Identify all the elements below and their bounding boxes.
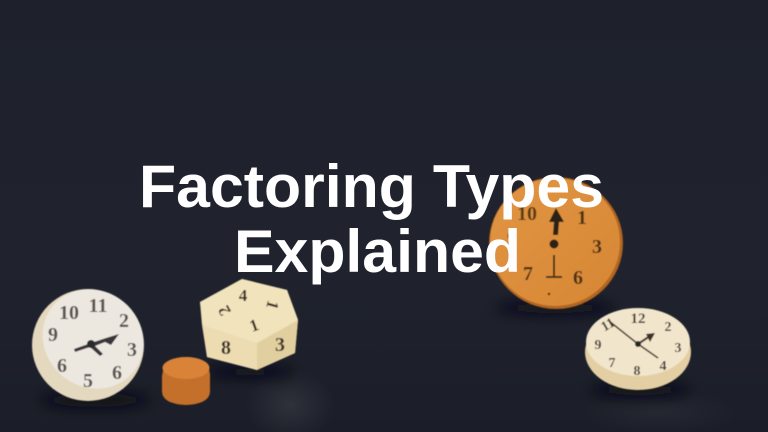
- icon: left white clock: 6: [112, 362, 122, 384]
- icon: large orange clock: [489, 177, 623, 309]
- icon: hexagonal die: [200, 279, 298, 370]
- icon: right cream clock: 9: [594, 338, 602, 353]
- icon: left white clock: 6: [57, 355, 67, 377]
- icon: left white clock: 11: [89, 295, 107, 317]
- icon: left white clock: 10: [59, 302, 79, 324]
- icon: left white clock: 9: [48, 324, 58, 346]
- icon: right cream clock: 11: [599, 316, 618, 335]
- title: Factoring Types: [139, 153, 604, 220]
- icon: large orange clock: 10: [517, 203, 537, 225]
- icon: right cream clock: 12: [630, 311, 646, 327]
- icon: large orange clock: 7: [523, 263, 533, 285]
- icon: hexagonal die: 1: [262, 298, 283, 311]
- title: Explained: [234, 218, 521, 285]
- icon: hexagonal die: 1: [247, 315, 261, 336]
- icon: orange cylinder: [162, 357, 210, 405]
- icon: right cream clock: [585, 308, 691, 390]
- icon: right cream clock: 7: [608, 356, 616, 371]
- icon: left white clock: 2: [119, 310, 129, 332]
- icon: right cream clock: 8: [634, 364, 640, 379]
- icon: hexagonal die: 4: [239, 286, 248, 305]
- icon: left white clock: [22, 269, 164, 409]
- icon: large orange clock: 9: [507, 228, 517, 250]
- icon: large orange clock: 1: [577, 207, 587, 229]
- icon: left white clock: 3: [127, 339, 137, 361]
- icon: hexagonal die: 2: [214, 302, 235, 319]
- icon: large orange clock: 6: [573, 267, 583, 289]
- icon: hexagonal die: 8: [221, 337, 231, 359]
- icon: large orange clock: 3: [592, 236, 602, 258]
- icon: right cream clock: 2: [664, 320, 672, 335]
- title: [139, 153, 604, 285]
- icon: right cream clock: 3: [674, 341, 682, 356]
- icon: left white clock: 5: [83, 370, 93, 392]
- icon: hexagonal die: 3: [275, 334, 285, 356]
- icon: right cream clock: 4: [660, 359, 666, 374]
